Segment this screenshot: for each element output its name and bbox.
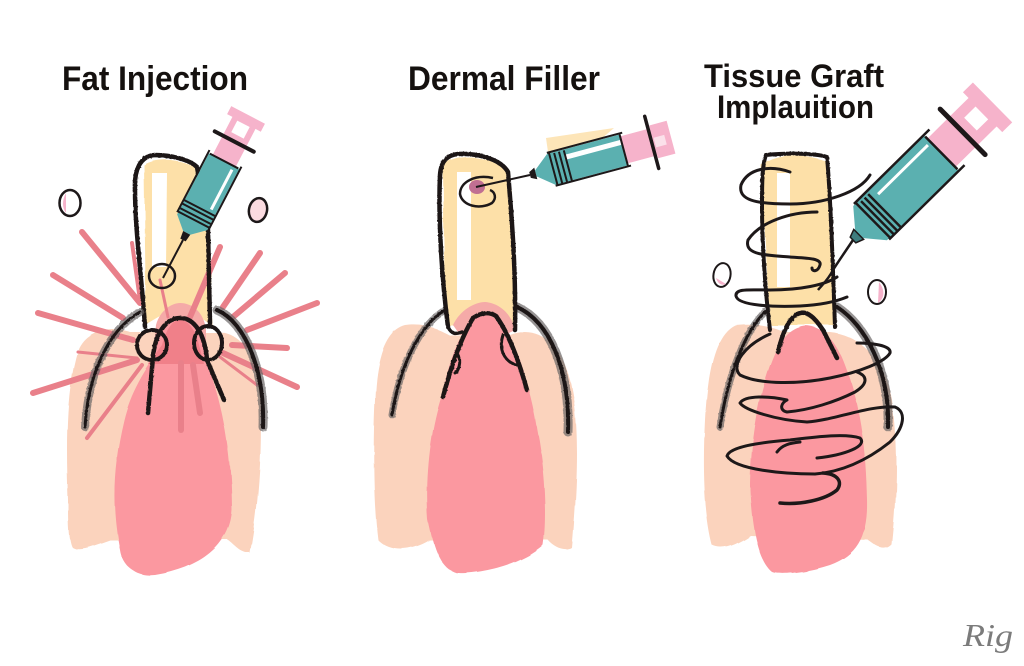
injection site circle (149, 264, 175, 288)
title: Tissue Graft Implauition (704, 58, 884, 125)
syringe (831, 80, 1015, 263)
title: Dermal Filler: Dermal Filler (408, 60, 600, 98)
injection rays (33, 232, 317, 438)
needle (163, 240, 183, 278)
yellow swoosh (546, 128, 614, 152)
needle (476, 175, 530, 187)
syringe (163, 105, 268, 250)
panel: dermal filler (374, 60, 678, 573)
gum tissue peach (374, 324, 577, 550)
fat droplet left (60, 190, 80, 216)
tooth highlight (152, 173, 167, 267)
gum outlines (85, 310, 263, 427)
spiral thread (727, 168, 902, 503)
syringe (523, 111, 678, 201)
title: Tissue Graft Implauition: Tissue Graft (704, 58, 884, 94)
dense pink centre (148, 320, 204, 364)
artist signature: Rig (962, 617, 1013, 653)
tooth highlight (777, 173, 790, 287)
tooth (443, 157, 516, 325)
needle (818, 240, 853, 290)
tooth (761, 155, 835, 325)
title: Tissue Graft Implauition: Implauition (717, 89, 874, 125)
tooth (144, 160, 212, 325)
fat droplet right (247, 196, 269, 224)
title: Fat Injection: Fat Injection (62, 60, 248, 98)
injection site (460, 177, 495, 206)
panel: fat injection (33, 60, 317, 575)
fat droplet right (868, 280, 886, 304)
gum tissue peach (67, 329, 261, 553)
gum tissue peach (704, 324, 896, 549)
fat droplet left (712, 262, 732, 288)
tooth outline (135, 155, 210, 327)
tooth and gum outlines (720, 154, 888, 427)
gum cap (154, 303, 206, 345)
gum core pink (114, 318, 232, 575)
tooth and gum outlines (392, 154, 568, 432)
gum cap (453, 302, 515, 335)
gum core pink (427, 315, 545, 573)
tooth highlight (457, 172, 471, 300)
panel: tissue graft implantation (704, 58, 1015, 573)
gum core pink (750, 326, 867, 573)
